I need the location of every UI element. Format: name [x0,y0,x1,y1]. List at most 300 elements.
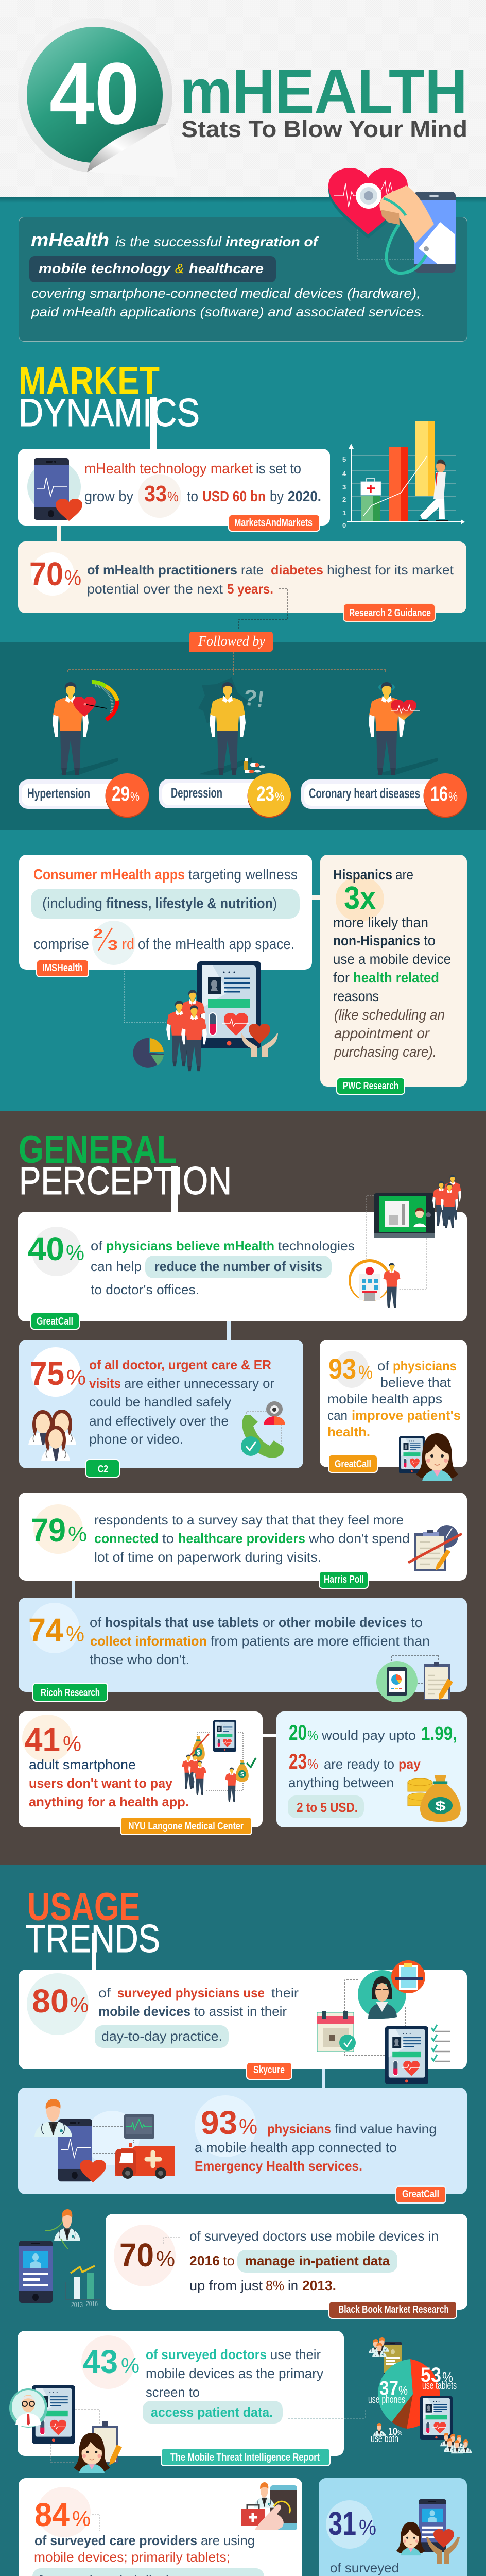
chart: device usage pie: % [398,2384,408,2398]
text: emergency services: find value having [335,2121,437,2137]
stat card: coronary heart diseases 16% [301,773,467,818]
text: users won't pay: adult smartphone [29,1757,136,1772]
text: physicians use devices: mobile devices [98,2004,190,2019]
text: hospitals: or [263,1615,275,1630]
panel: 79% respondents [19,1493,467,1588]
text: improve health: mobile health apps [327,1391,442,1406]
text: hospitals: of [90,1615,102,1630]
connector [312,895,337,900]
source tag [161,2448,330,2466]
text: unnecessary visits: visits [89,1376,121,1391]
panel: intro [19,217,467,341]
intro text: & [175,261,184,276]
text: hospitals: from patients are more efficient than [211,1633,430,1649]
text: users won't pay [29,1757,189,1809]
source tag [319,1571,368,1588]
text: manage in-patient data: 8% [266,2278,284,2293]
intro text: mHealth [31,229,109,250]
text: hispanics: are [395,867,413,883]
stat card: coronary heart diseases 16%: 16 [430,783,448,805]
source tag: Skycure [253,2064,285,2076]
source tag: Research 2 Guidance [349,607,431,619]
text: unnecessary visits [89,1357,274,1447]
heading: usage trends: USAGE [27,1885,140,1929]
text: market growth: % [167,488,179,504]
stat: 70% [114,2225,176,2286]
text: market growth: USD 60 bn [202,488,266,505]
icon: heart in hands [241,1024,278,1057]
text: emergency services: a mobile health app connected to [195,2140,397,2155]
panel: 93% emergency health [18,2088,467,2203]
text: emergency services [195,2121,437,2174]
text: consumer apps: Consumer mHealth apps [33,867,185,883]
icon: medkit on bar [361,479,381,495]
source tag [329,2301,457,2318]
source tag: GreatCall [37,1316,73,1327]
stat: 84%: % [72,2506,91,2531]
stat: 75%: 75 [30,1355,64,1392]
panel: 31% and 30% organisations [319,2478,467,2576]
source tag [33,1683,108,1701]
source tag [31,1313,79,1329]
text: hispanics: non-Hispanics [333,933,420,948]
panel: 93% physicians [320,1340,467,1481]
text: connected: lot of time on paperwork during visits. [94,1549,321,1565]
text: improve health: believe that [380,1375,452,1390]
text: willingness to pay: would pay upto [321,1727,416,1743]
stat: 79% [31,1504,87,1554]
text: hispanics: purchasing care). [334,1044,437,1060]
text: emergency services: Emergency Health services. [195,2158,362,2174]
text: unnecessary visits: phone or video. [89,1431,183,1447]
stat: 70%: 70 [119,2236,154,2274]
panel: 80% surveyed physicians [19,1960,467,2084]
text: connected: to [162,1531,174,1546]
icon: phone with heart [27,458,82,521]
text: physicians use devices: to assist in their [194,2004,287,2019]
connector [92,1933,96,1970]
text: improve health: physicians [393,1358,457,1374]
chart: device usage pie: % [442,2369,453,2385]
text: unnecessary visits: of all doctor, urgent care & ER [89,1357,271,1372]
text: hospitals: hospitals that use tablets [105,1615,259,1630]
source tag: GreatCall [402,2189,439,2200]
tag: followed by [189,632,273,652]
panel: 40% physicians [18,1175,467,1329]
text: diabetes: rate [241,562,264,578]
source tag [343,604,435,621]
panel: consumer apps [19,855,312,977]
heading: general perception: GENERAL [19,1128,177,1172]
text: hispanics [333,867,451,1060]
text: improve health: can [327,1408,348,1423]
text: physicians use devices: of [98,1985,111,2001]
text: manage in-patient data: of surveyed doctors use mobile devices in [189,2228,439,2244]
text: hispanics: 3x [344,880,376,916]
text: primary screen: access patient data. [151,2404,273,2420]
text: hospitals: to [411,1615,423,1630]
icon: three female doctors [28,1410,76,1461]
text: manage in-patient data: 2016 [189,2253,220,2268]
stat: 31% [326,2500,376,2549]
text: connected: connected [94,1531,159,1546]
text: connected: healthcare providers [178,1531,305,1546]
stat: 75% [30,1347,86,1397]
panel: 33% market growth [18,449,330,531]
intro text: covering smartphone-connected medical devices (hardware), [31,285,421,301]
text: connected: respondents to a survey say that that they feel more [94,1512,404,1528]
text: improve health: health. [327,1424,370,1439]
heading: general perception: PERCEPTION [19,1159,232,1203]
text: reduce visits [91,1238,355,1297]
text: primary screen: mobile devices as the primary [146,2366,323,2381]
intro text [29,229,425,319]
text: market growth: by [270,488,284,505]
stat: 74% [28,1603,84,1653]
panel: hispanics 3x [320,855,467,1094]
figure: hypertension [53,682,118,775]
stat card: depression 23%: % [275,790,284,803]
chart: device usage pie: use both [371,2433,398,2445]
heading: market dynamics [19,359,200,435]
text: diabetes: of mHealth practitioners [87,562,237,578]
text: physicians use devices [95,1985,299,2048]
text: primary screen: screen to [146,2384,200,2400]
chart: device usage pie: 53 [421,2364,441,2386]
stat: 80%: % [70,1993,89,2017]
icon: phone, doctor and bar chart: 2016 [86,2299,98,2308]
arrow: dashed link to followed by [239,589,288,630]
text: hispanics: Hispanics [333,867,392,883]
text: manage in-patient data: 2013. [302,2278,336,2293]
section top shading [0,197,486,203]
stat: 70%: % [64,566,81,590]
connector [263,1734,277,1737]
text: improve health: % [358,1362,373,1383]
figure: depression: ?! [242,685,266,713]
text: willingness to pay [288,1720,457,1818]
text: primary screen: of surveyed doctors [146,2347,267,2362]
band: followed by [0,642,486,830]
heading: usage trends [26,1885,160,1961]
text: willingness to pay: % [307,1727,318,1743]
text: consumer apps: targeting wellness [188,867,298,883]
text: reduce visits: of [91,1238,103,1253]
icon: heart, stethoscope, hand and phone [328,168,456,273]
text: reduce visits: can help [91,1259,142,1274]
source tag [337,1078,405,1094]
text: reduce visits: to doctor's offices. [91,1282,199,1297]
text: willingness to pay: % [307,1756,318,1772]
stat: 41%: 41 [25,1721,60,1758]
icon: pills [244,758,265,773]
stat: 84% [34,2487,91,2537]
icon: pie chart [133,1038,164,1068]
chart: rising bars with man: 3 [342,483,346,491]
text: consumer apps: ) [273,895,277,912]
text: consumer apps [31,867,300,965]
text: users won't pay: users don't want to pay [29,1775,173,1791]
intro text: is the successful [115,234,222,249]
text: care providers: are using [201,2533,255,2548]
text: willingness to pay: 2 to 5 USD. [297,1800,358,1815]
text: consumer apps: 3 [108,937,118,953]
source tag: IMSHealth [42,962,83,974]
text: hispanics: appointment or [334,1025,430,1041]
text: connected [94,1512,410,1565]
text: physicians use devices: their [271,1985,299,2001]
text: willingness to pay: 1.99, [421,1723,457,1744]
stat: 79%: % [68,1522,87,1546]
text: hispanics: (like scheduling an [334,1007,445,1023]
panel: 41% unwilling to pay [19,1711,263,1835]
text: consumer apps: 2 [93,926,103,941]
source tag [120,1817,252,1835]
text: willingness to pay: anything between [288,1775,394,1790]
source tag [247,2062,292,2079]
dashed link [164,2238,181,2244]
stat: 93%: 93 [201,2104,237,2141]
illustration: patients, tablet and chart [124,961,278,1071]
subheading: Stats To Blow Your Mind [181,116,467,142]
icon: coins and money bag [408,1775,461,1822]
intro text: paid mHealth applications (software) and associated services. [31,304,425,319]
text: manage in-patient data: in [288,2278,298,2293]
stat: 80% [27,1973,89,2035]
text: unnecessary visits: and effectively over the [89,1413,229,1429]
stat: 74%: 74 [28,1612,63,1649]
icon: tablet and clipboard [376,1655,453,1702]
heading: general perception [19,1128,232,1203]
text: improve health: 93 [328,1352,356,1385]
stat card: depression 23%: Depression [171,785,222,801]
stat: 70%: 70 [29,555,63,592]
icon: girl with tablet [399,1433,458,1481]
source tag [328,1455,377,1472]
text: hospitals: those who don't. [90,1652,189,1667]
section background: usage trends [0,1865,486,2576]
intro text: integration of [225,234,319,249]
icon: man carrying bar [418,460,448,522]
panel: 75% visits [19,1340,303,1477]
text: reduce visits: physicians believe mHealth [106,1238,274,1253]
stat: 40% [28,1227,84,1276]
source tag [86,1460,119,1477]
stat card: hypertension 29%: 29 [112,783,130,805]
title block [18,18,467,178]
text: consumer apps: comprise [33,936,89,953]
text: reduce visits: reduce the number of visits [154,1259,322,1274]
panel: 84% care providers [19,2478,302,2576]
text: consumer apps: fitness, lifestyle & nutrition [106,895,273,912]
arrow: dashed branches [68,652,386,676]
connector [57,526,61,542]
figure: depression [198,677,266,775]
chart: device usage pie: 37 [379,2378,398,2399]
text: physicians use devices: day-to-day practice. [101,2028,222,2044]
chart: rising bars with man: 1 [342,509,346,517]
chart: rising bars with man [342,421,465,529]
icon: doctor, calendar and tablet [317,1960,450,2084]
icon: crossed-out paperwork [408,1525,462,1571]
source tag: Black Book Market Research [338,2304,449,2315]
text: manage in-patient data [189,2228,439,2293]
stat card: depression 23% [159,773,291,818]
source tag [229,515,320,531]
chart: rising bars with man: 2 [342,496,346,503]
source tag: The Mobile Threat Intelligence Report [170,2452,320,2463]
connector [227,1321,231,1340]
heading: mHEALTH: mHEALTH [180,56,467,126]
text: diabetes: potential over the next [87,581,223,597]
stat: 74%: % [66,1622,84,1646]
stat: 43%: 43 [83,2343,118,2380]
icon: phone and webcam [241,1401,285,1458]
text: hispanics: health related [353,970,439,986]
text: manage in-patient data: manage in-patient data [245,2253,390,2268]
stat card: coronary heart diseases 16%: Coronary heart diseases [309,786,420,801]
figure: coronary heart disease [369,682,438,775]
text: care providers: mobile devices; primarily tablets; [34,2549,230,2565]
source tag: MarketsAndMarkets [234,517,313,529]
stat: 31%: % [359,2515,376,2539]
connector [171,1166,178,1212]
icon: tablet, people and hospital [349,1175,461,1308]
chart: rising bars with man: 0 [342,521,346,529]
text: improve health: of [377,1358,390,1374]
text: specific app: of surveyed [330,2560,399,2575]
heading: market dynamics: DYNAMICS [19,391,200,435]
stat card: depression 23%: 23 [256,783,274,805]
intro text: mobile technology [39,261,171,276]
panel: 74% hospitals [19,1598,467,1702]
tag: followed by: Followed by [198,633,265,649]
stat: 70%: % [156,2247,175,2271]
source tag: C2 [98,1464,108,1475]
section background: market dynamics [0,197,486,1111]
source tag: PWC Research [343,1080,398,1092]
text: willingness to pay: 23 [289,1749,307,1773]
icon: doctor, tablet, clipboard, girl [9,2385,122,2473]
chart: device usage pie: use phones [368,2394,405,2405]
page background: header [0,0,486,197]
text: diabetes [87,562,454,597]
text: users won't pay: anything for a health app. [29,1794,189,1809]
chart: rising bars with man: 5 [342,455,346,463]
text: hispanics: use a mobile device [333,951,451,967]
text: primary screen: use their [270,2347,321,2362]
icon: girl, phone and heart in hands [396,2499,460,2564]
source tag: Harris Poll [324,1574,364,1585]
text: hospitals: other mobile devices [279,1615,407,1630]
chart: rising bars with man: 4 [342,470,346,478]
stat: 75%: % [66,1365,86,1389]
chart: device usage pie: % [397,2429,402,2436]
icon: phone, doctor, monitor, ambulance [34,2099,175,2182]
chart: device usage pie: 10 [388,2426,397,2437]
stat: 31%: 31 [328,2505,356,2542]
stat card: coronary heart diseases 16%: % [448,790,458,803]
text: diabetes: diabetes [271,562,323,578]
stat card: hypertension 29%: Hypertension [27,786,90,801]
section background: general perception [0,1111,486,1865]
source tag: Ricoh Research [41,1687,100,1699]
panel: 70% in-patient data [106,2214,467,2318]
text: manage in-patient data: up from just [189,2278,263,2293]
text: market growth: is set to [256,461,301,477]
stat card: hypertension 29%: % [130,790,140,803]
icon: payment flow [182,1720,256,1802]
text: physicians use devices: surveyed physicians use [117,1985,265,2001]
text: market growth: 2020. [288,488,321,505]
stat: 40%: % [66,1241,84,1265]
panel: 20% would pay [276,1711,467,1827]
text: diabetes: 5 years. [227,581,273,597]
text: improve health [327,1352,461,1439]
stat card: hypertension 29% [19,773,149,818]
text: market growth: grow by [84,488,133,505]
stat: 43% [81,2335,140,2389]
text: hispanics: for [333,970,350,986]
connector [150,397,157,450]
stat: 70% [29,552,81,596]
sticker badge with 40 [18,18,178,178]
text: diabetes: highest for its market [327,562,454,578]
source tag: NYU Langone Medical Center [128,1821,244,1832]
connector [322,2069,325,2088]
chart: device usage pie [288,2337,472,2453]
stat: 40%: 40 [28,1230,64,1267]
stat: 80%: 80 [32,1982,69,2020]
text: care providers: of surveyed care providers [34,2533,197,2548]
stat: 43%: % [121,2353,140,2378]
source tag [37,960,89,977]
text: manage in-patient data: to [223,2253,235,2268]
icon: phone, doctor and bar chart: 2013 [71,2300,83,2309]
stat: 79%: 79 [31,1512,66,1549]
text: hispanics: reasons [333,988,379,1004]
text: consumer apps: rd [122,936,134,953]
chart: device usage pie: use tablets [422,2380,457,2392]
text: consumer apps: (including [42,895,102,912]
text: emergency services: physicians [267,2121,331,2137]
heading: market dynamics: MARKET [19,359,160,403]
text: market growth: mHealth technology market [84,461,253,477]
text: willingness to pay: 20 [289,1720,307,1744]
text: unnecessary visits: are either unnecessary or [124,1376,274,1391]
text: unnecessary visits: could be handled safely [89,1394,231,1410]
stat: 93%: % [239,2114,257,2139]
stat: 84%: 84 [34,2496,70,2533]
text: hispanics: to [424,933,436,948]
text: consumer apps: of the mHealth app space. [138,936,294,953]
stat: 41% [22,1715,81,1762]
text: market growth: 33 [144,481,167,506]
text: reduce visits: technologies [278,1238,355,1253]
panel: 70% diabetes [18,541,466,621]
text: market growth [84,461,321,518]
icon: tablet, doctor, medkit and hand [241,2482,297,2530]
source tag: GreatCall [335,1459,371,1470]
stat: 93% [195,2095,257,2157]
text: hispanics: more likely than [333,914,428,930]
connector [72,1581,75,1598]
text: hospitals [90,1615,430,1667]
text: connected: who don't spend [308,1531,410,1546]
text: willingness to pay: are ready to [324,1756,394,1772]
text: improve health: improve patient's [352,1408,461,1423]
text: primary screen [143,2347,323,2424]
